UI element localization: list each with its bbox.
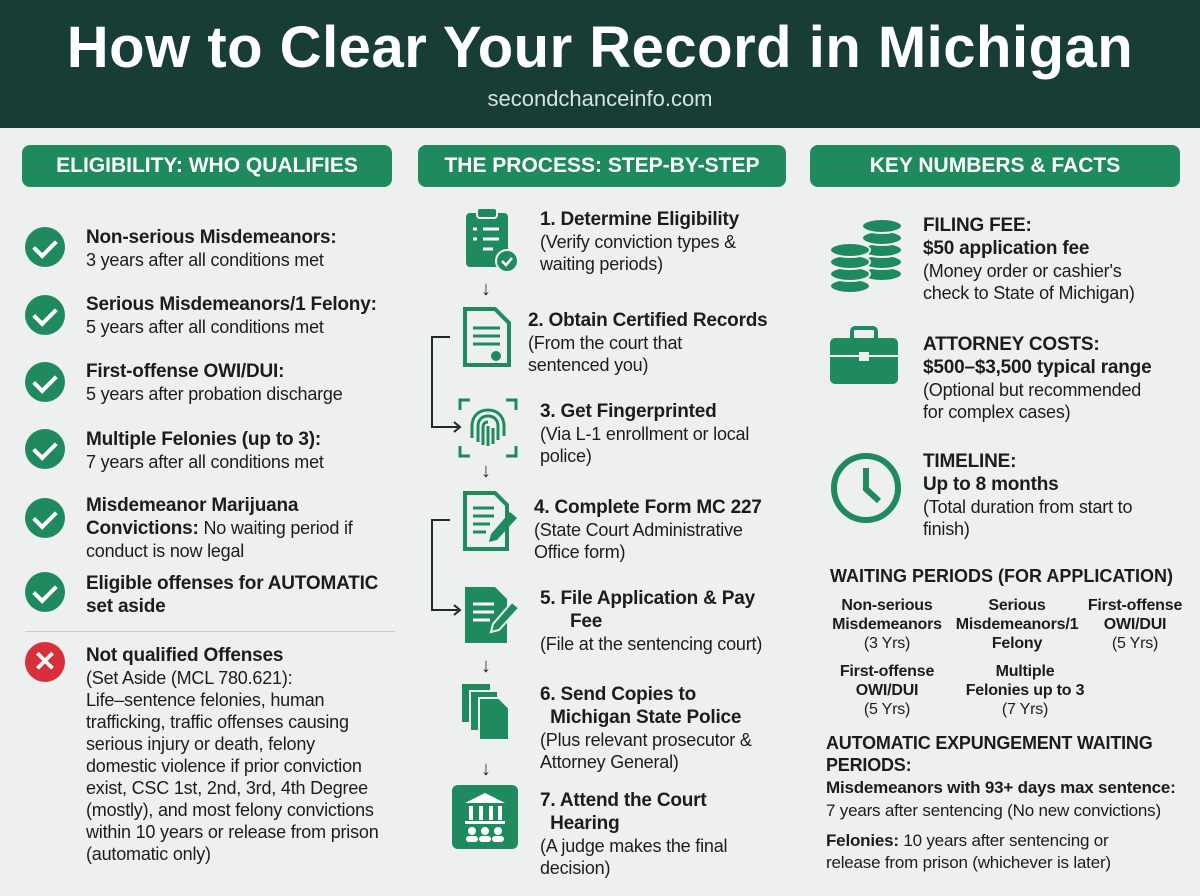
subtitle: secondchanceinfo.com xyxy=(487,86,713,111)
step 7: 7. Attend the Court xyxy=(540,790,706,811)
attorney costs: ATTORNEY COSTS: xyxy=(923,334,1099,355)
panel: eligibility xyxy=(25,227,395,864)
timeline xyxy=(923,451,1132,539)
waiting periods xyxy=(830,566,1182,718)
step 5: 5. File Application & Pay xyxy=(540,588,755,609)
icon: clipboard xyxy=(466,209,517,271)
waiting periods: (5 Yrs) xyxy=(1112,635,1158,652)
check 3 xyxy=(25,362,65,402)
automatic expungement: PERIODS: xyxy=(826,755,911,775)
item 2 xyxy=(86,294,377,337)
item 1 xyxy=(86,227,336,270)
waiting periods: First-offense xyxy=(1088,597,1182,614)
icon: form with pen xyxy=(463,491,517,551)
step 1: (Verify conviction types & xyxy=(540,232,736,252)
panel: process xyxy=(431,209,768,878)
step 4 xyxy=(534,497,762,562)
check 5 xyxy=(25,498,65,538)
icon: document xyxy=(463,307,511,367)
waiting periods: Misdemeanors xyxy=(832,616,942,633)
automatic expungement: Misdemeanors with 93+ days max sentence: xyxy=(826,778,1176,797)
waiting periods: Multiple xyxy=(996,663,1054,680)
check 4 xyxy=(25,429,65,469)
item 6: set aside xyxy=(86,596,166,617)
step 4: 4. Complete Form MC 227 xyxy=(534,497,762,518)
connector xyxy=(431,336,462,433)
pill: key numbers xyxy=(810,145,1180,187)
not qualified: trafficking, traffic offenses causing xyxy=(86,712,349,732)
not qualified xyxy=(86,645,379,864)
item 6: Eligible offenses for AUTOMATIC xyxy=(86,573,378,594)
step 2: (From the court that xyxy=(528,333,682,353)
filing fee xyxy=(923,215,1135,303)
waiting periods: OWI/DUI xyxy=(1104,616,1166,633)
not qualified: (mostly), and most felony convictions xyxy=(86,800,374,820)
item 6 xyxy=(86,573,378,617)
icon: clock xyxy=(831,453,901,523)
step 3 xyxy=(540,401,749,466)
step 1 xyxy=(540,209,740,274)
step 2: 2. Obtain Certified Records xyxy=(528,310,768,331)
item 3: First-offense OWI/DUI: xyxy=(86,361,284,382)
timeline: TIMELINE: xyxy=(923,451,1016,472)
step 1: waiting periods) xyxy=(540,254,663,274)
icon: coins xyxy=(831,220,901,292)
item 4: Multiple Felonies (up to 3): xyxy=(86,429,321,450)
waiting periods: (5 Yrs) xyxy=(864,701,910,718)
arrow: ↓ xyxy=(481,278,491,300)
filing fee: FILING FEE: xyxy=(923,215,1032,236)
item 3: 5 years after probation discharge xyxy=(86,384,343,404)
icon: courthouse xyxy=(452,785,518,849)
step 4: Office form) xyxy=(534,542,625,562)
item 4 xyxy=(86,429,324,472)
pill: eligibility xyxy=(22,145,392,187)
not qualified: (automatic only) xyxy=(86,844,211,864)
header xyxy=(0,0,1200,128)
step 7: (A judge makes the final xyxy=(540,836,727,856)
waiting periods: Felony xyxy=(992,635,1042,652)
not qualified: domestic violence if prior conviction xyxy=(86,756,362,776)
panel: process: ↓ xyxy=(481,655,491,677)
item 2: 5 years after all conditions met xyxy=(86,317,324,337)
waiting periods: Felonies up to 3 xyxy=(966,682,1084,699)
icon: x xyxy=(25,642,65,682)
filing fee: $50 application fee xyxy=(923,238,1089,259)
item 2: Serious Misdemeanors/1 Felony: xyxy=(86,294,377,315)
step 2 xyxy=(528,310,768,375)
step 6: 6. Send Copies to xyxy=(540,684,696,705)
felonies: release from prison (whichever is later) xyxy=(826,853,1111,872)
not qualified: Not qualified Offenses xyxy=(86,645,283,666)
check 2 xyxy=(25,295,65,335)
icon: briefcase xyxy=(830,326,898,384)
waiting periods: (3 Yrs) xyxy=(864,635,910,652)
automatic expungement xyxy=(826,733,1176,820)
step 3: 3. Get Fingerprinted xyxy=(540,401,717,422)
waiting periods: WAITING PERIODS (FOR APPLICATION) xyxy=(830,566,1173,586)
step 4: (State Court Administrative xyxy=(534,520,743,540)
not qualified: serious injury or death, felony xyxy=(86,734,315,754)
step 6: (Plus relevant prosecutor & xyxy=(540,730,752,750)
waiting periods: OWI/DUI xyxy=(856,682,918,699)
step 3: (Via L-1 enrollment or local xyxy=(540,424,749,444)
item 5 xyxy=(86,495,353,561)
title: How to Clear Your Record in Michigan xyxy=(67,15,1133,80)
timeline: Up to 8 months xyxy=(923,474,1058,495)
waiting periods: (7 Yrs) xyxy=(1002,701,1048,718)
timeline: finish) xyxy=(923,519,970,539)
attorney costs: for complex cases) xyxy=(923,402,1070,422)
filing fee: check to State of Michigan) xyxy=(923,283,1135,303)
panel: process: ↓ xyxy=(481,758,491,780)
waiting periods: Non-serious xyxy=(841,597,933,614)
step 7: decision) xyxy=(540,858,610,878)
automatic expungement: 7 years after sentencing (No new convictions) xyxy=(826,801,1161,820)
step 1: 1. Determine Eligibility xyxy=(540,209,739,230)
pill: process: THE PROCESS: STEP-BY-STEP xyxy=(444,154,760,177)
item 1: 3 years after all conditions met xyxy=(86,250,324,270)
step 6: Attorney General) xyxy=(540,752,679,772)
pill: eligibility: ELIGIBILITY: WHO QUALIFIES xyxy=(56,154,358,177)
not qualified: exist, CSC 1st, 2nd, 3rd, 4th Degree xyxy=(86,778,368,798)
felonies xyxy=(826,831,1111,872)
not qualified: Life–sentence felonies, human xyxy=(86,690,324,710)
check 6 xyxy=(25,572,65,612)
not qualified: (Set Aside (MCL 780.621): xyxy=(86,668,292,688)
waiting periods: Serious xyxy=(988,597,1046,614)
filing fee: (Money order or cashier's xyxy=(923,261,1122,281)
felonies: Felonies: 10 years after sentencing or xyxy=(826,831,1108,850)
icon: copies xyxy=(462,684,508,739)
step 5: Fee xyxy=(570,611,602,632)
step 6: Michigan State Police xyxy=(550,707,741,728)
step 6 xyxy=(540,684,752,772)
attorney costs: $500–$3,500 typical range xyxy=(923,357,1151,378)
panel: key numbers xyxy=(826,215,1182,872)
automatic expungement: AUTOMATIC EXPUNGEMENT WAITING xyxy=(826,733,1153,753)
item 5: conduct is now legal xyxy=(86,541,244,561)
item 4: 7 years after all conditions met xyxy=(86,452,324,472)
step 3: police) xyxy=(540,446,592,466)
step 2: sentenced you) xyxy=(528,355,648,375)
item 5: Misdemeanor Marijuana xyxy=(86,495,298,516)
panel: process: ↓ xyxy=(481,460,491,482)
pill: key numbers: KEY NUMBERS & FACTS xyxy=(870,154,1120,177)
waiting periods: Misdemeanors/1 xyxy=(956,616,1078,633)
not qualified: within 10 years or release from prison xyxy=(86,822,379,842)
step 5 xyxy=(540,588,762,654)
check 1 xyxy=(25,227,65,267)
pill: process xyxy=(418,145,786,187)
timeline: (Total duration from start to xyxy=(923,497,1132,517)
icon: file xyxy=(465,587,518,643)
attorney costs: (Optional but recommended xyxy=(923,380,1141,400)
icon: x: ✕ xyxy=(33,646,57,677)
step 7 xyxy=(540,790,727,878)
item 5: Convictions: No waiting period if xyxy=(86,518,353,539)
attorney costs xyxy=(923,334,1151,422)
step 7: Hearing xyxy=(550,813,620,834)
step 5: (File at the sentencing court) xyxy=(540,634,762,654)
icon: fingerprint xyxy=(458,398,518,458)
item 3 xyxy=(86,361,343,404)
item 1: Non-serious Misdemeanors: xyxy=(86,227,336,248)
waiting periods: First-offense xyxy=(840,663,934,680)
